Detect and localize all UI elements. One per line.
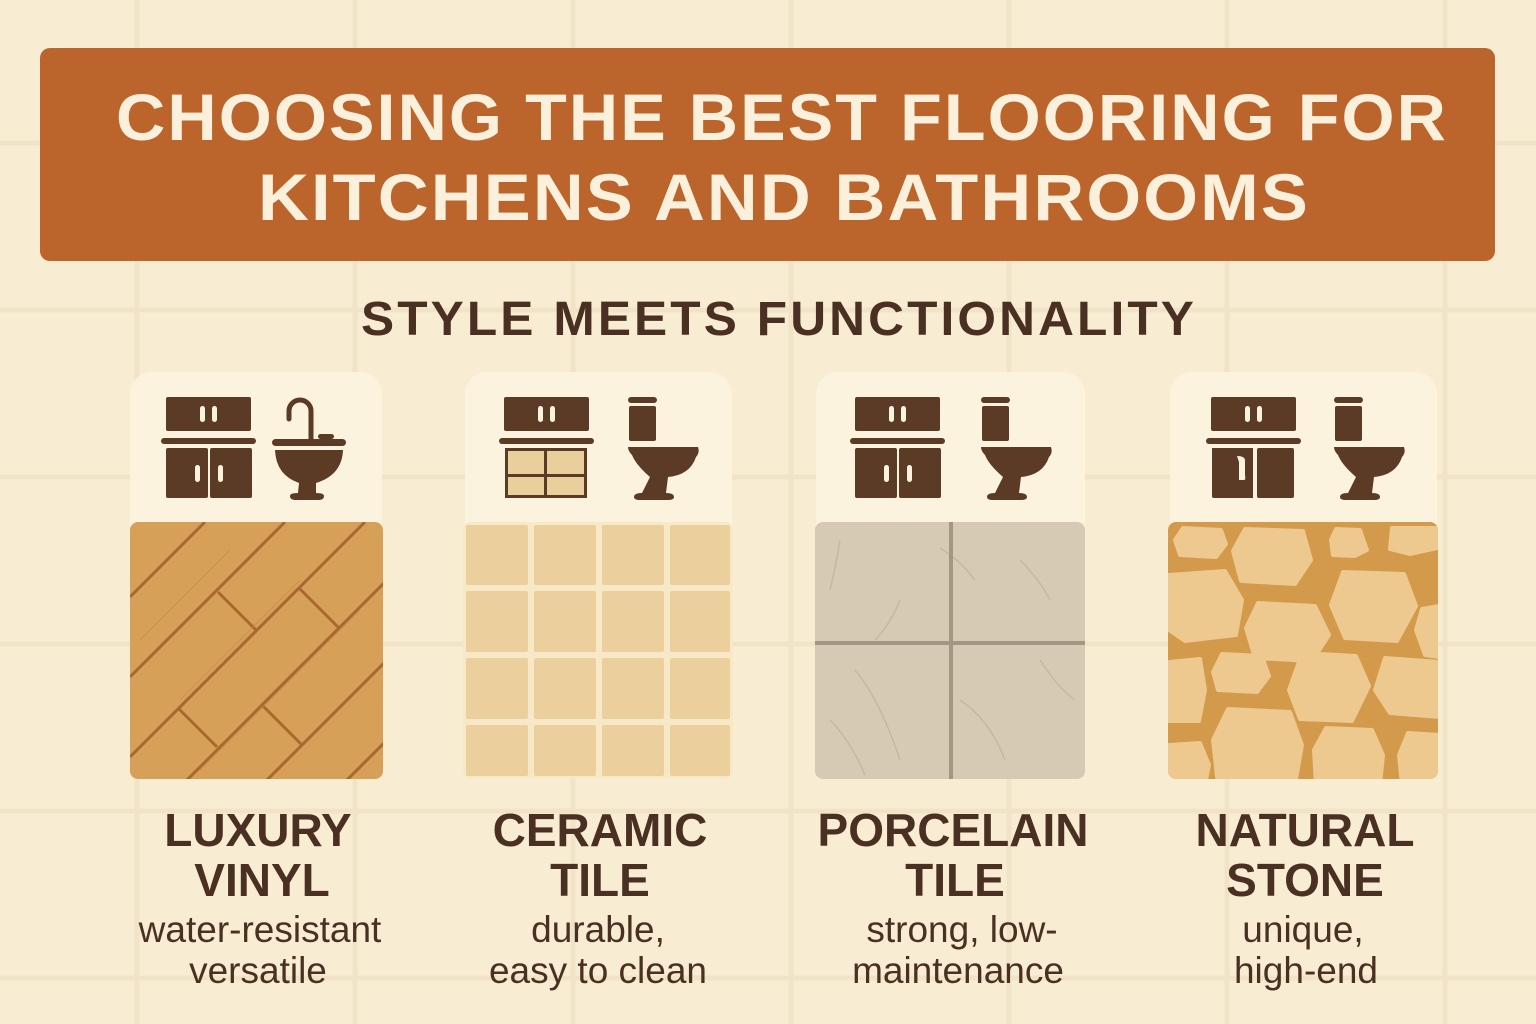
label: luxury vinyl: versatile <box>189 950 327 991</box>
label: porcelain tile <box>818 804 1088 991</box>
label: natural stone: high-end <box>1234 950 1378 991</box>
icon: toilet <box>1334 397 1405 500</box>
label: luxury vinyl <box>138 804 382 991</box>
icon: cabinet <box>850 397 945 498</box>
label: luxury vinyl: water-resistant <box>138 909 382 950</box>
panel: luxury vinyl <box>130 372 383 779</box>
title line 2: KITCHENS AND BATHROOMS <box>258 160 1310 234</box>
label: luxury vinyl: LUXURY <box>164 804 352 856</box>
label: natural stone: STONE <box>1226 854 1384 906</box>
label: ceramic tile: TILE <box>550 854 650 906</box>
label: luxury vinyl: VINYL <box>194 854 330 906</box>
label: ceramic tile: CERAMIC <box>493 804 707 856</box>
floor: wood planks <box>130 522 383 779</box>
icon: cabinet with tiles <box>499 397 594 498</box>
panel: natural stone <box>1168 372 1439 785</box>
title banner <box>40 48 1495 261</box>
icon: cabinet <box>1206 397 1301 498</box>
label: natural stone: unique, <box>1242 909 1364 950</box>
title: CHOOSING THE BEST FLOORING FOR <box>116 80 1448 154</box>
label: ceramic tile <box>489 804 707 991</box>
icon: sink <box>272 400 346 500</box>
panel: ceramic tile <box>463 372 733 779</box>
label: porcelain tile: strong, low- <box>866 909 1058 950</box>
icon: kitchen cabinet <box>161 397 256 498</box>
subtitle: STYLE MEETS FUNCTIONALITY <box>361 293 1197 346</box>
label: natural stone <box>1196 804 1414 991</box>
panel: porcelain tile <box>815 372 1085 779</box>
icon: toilet <box>981 397 1052 500</box>
label: ceramic tile: easy to clean <box>489 950 707 991</box>
floor: flagstone <box>1168 522 1439 785</box>
icon: toilet <box>628 397 699 500</box>
label: porcelain tile: maintenance <box>852 950 1064 991</box>
label: natural stone: NATURAL <box>1196 804 1414 856</box>
floor: ceramic tiles <box>463 522 733 779</box>
floor: porcelain <box>815 522 1085 779</box>
label: porcelain tile: PORCELAIN <box>818 804 1088 856</box>
label: porcelain tile: TILE <box>905 854 1005 906</box>
label: ceramic tile: durable, <box>531 909 665 950</box>
